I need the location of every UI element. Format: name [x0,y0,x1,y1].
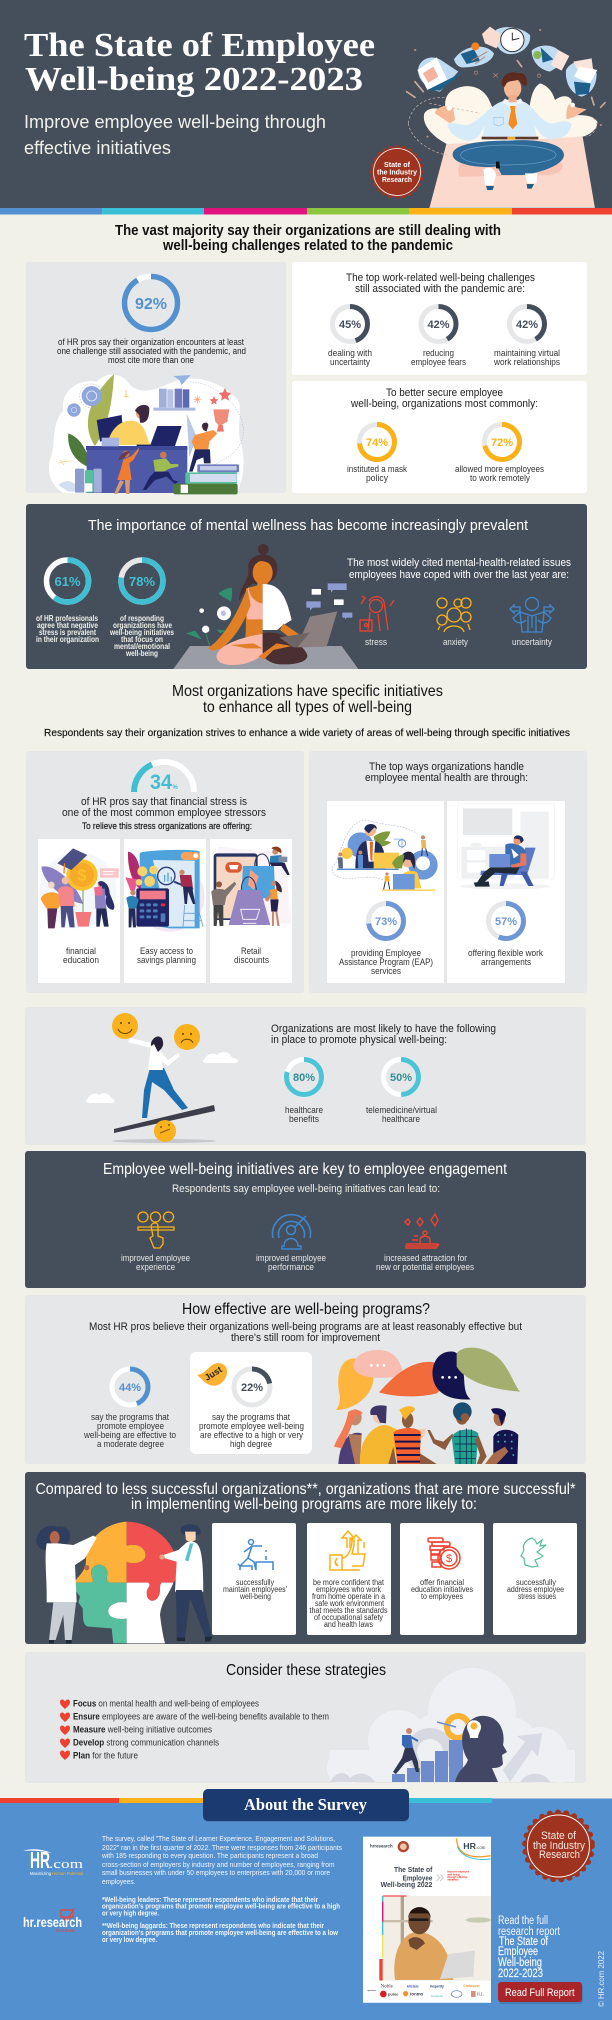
heading: specific initiatives [172,683,443,716]
subheading: lead to: Respondents say employee well-being initiatives can lead to: [172,1183,440,1195]
icon: increased attraction [405,1214,439,1248]
donut: 80% healthcare benefits: benefits [289,1114,319,1124]
donut: 78%: of responding [120,614,164,623]
card: retail discounts: discounts [234,955,269,965]
donut: 44% moderate degree: 44% [119,1382,141,1394]
text: mental-health issues heading: The most widely cited mental-health-related issues [347,557,571,569]
illustration: meditating man with floating office items [407,27,605,209]
card: work from home safety: and health laws [324,1620,373,1629]
card: financial education: education [63,955,99,965]
labels: stress anxiety uncertainty [365,637,552,647]
title [24,27,375,98]
icon: head with lightning [521,1538,546,1567]
text: secure well-being heading [350,387,538,410]
icon: stress [360,596,394,631]
donut: 42% reducing employee fears: reducing [423,348,454,358]
panel: top work-related challenges [292,262,587,375]
badge: State of the Industry Research: Research [382,177,412,184]
donut: 78%: well-being [125,649,158,658]
text: well-being leaders definition [102,1897,340,1918]
donut: 44% moderate degree [83,1369,176,1449]
heading: pandemic challenges: The vast majority say their organizations are still dealing with [115,222,501,239]
labels: engagement benefits: improved employee [256,1253,326,1263]
icon: thumbs up with arrows [330,1531,365,1570]
donut: 45% dealing with uncertainty: 45% [339,319,361,331]
donut: 44% moderate degree: well-being are effective to [83,1430,176,1440]
donut: 74% mask policy: instituted a mask [347,464,407,474]
badge: State of the Industry Research large: Research [539,1849,580,1861]
card: address stress issues: stress issues [518,1592,556,1601]
text: top ways heading: employee mental health are through: [365,772,528,784]
text: read the full research report: 2022-2023 [498,1968,543,1980]
gauge: 34%: 34 [150,771,172,794]
text: 92 percent description [57,337,246,365]
card: 22% high degree: are effective to a high or very [200,1430,303,1440]
text: secure well-being heading: well-being, organizations most commonly: [350,398,538,410]
text: read the full research report: Well-being [498,1957,542,1969]
illustration: climbing to head with lightbulb [327,1668,575,1786]
illustration: meditating woman with laptop [173,544,358,669]
donut: 61%: of HR professionals [36,614,98,623]
donut: 50% telemedicine: healthcare [382,1114,420,1124]
badge: State of the Industry Research large: State of [541,1830,577,1842]
heading: consider these strategies: Consider these strategies [226,1662,386,1679]
report cover: Improve employee [447,1871,470,1874]
donut: 57% [488,904,524,938]
donut: 42% maintaining virtual work relationships: work relationships [493,357,560,367]
banner: About the Survey [203,1789,409,1822]
donut: 78%: mental/emotional [114,642,170,651]
report cover: Crossover [463,1984,480,1988]
heading: specific initiatives: to enhance all types of well-being [203,699,412,716]
list: strategies: Develop strong communication channels [73,1738,219,1748]
labels: stress anxiety uncertainty: uncertainty [512,637,552,647]
text: well-being laggards definition: or very low degree. [102,1937,157,1944]
donut: 73% [368,904,404,938]
report cover: hrresearch [370,1844,393,1849]
logo: HR.com [23,1847,83,1876]
card: financial education initiatives [400,1523,484,1635]
card: flexible work arrangements: arrangements [481,957,531,967]
card: retail discounts: Retail [241,946,261,956]
card: address stress issues [493,1523,577,1635]
panel: consider these strategies [25,1652,586,1786]
text: challenges heading [346,272,535,295]
text: well-being leaders definition: organization's programs that promote employee well-being are effective to a high [102,1904,340,1910]
card: work from home safety: be more confident that [313,1578,385,1587]
illustration: office workers and trophy [49,374,244,494]
report cover: JLL [477,1992,484,1997]
text: effectiveness subheading [89,1321,522,1344]
donut: 73%: 73% [375,916,397,928]
donut: 92%: 92% [135,296,167,313]
illustration: woman balancing emotions on a seesaw [86,1013,238,1143]
logo: HR.com: .com [49,1856,83,1871]
report cover: well-being [447,1873,460,1876]
card: address stress issues: address employee [507,1585,564,1594]
donut: 92% [124,276,178,330]
text: survey description: employees. [102,1877,136,1886]
list: strategies: Focus on mental health and well-being of employees [73,1698,259,1710]
card: maintain well-being: well-being [239,1592,271,1601]
card: maintain well-being [212,1523,296,1635]
panel: mental health handling [309,751,587,993]
donut: 44% moderate degree: a moderate degree [97,1439,164,1449]
donut: 42% reducing employee fears: 42% [427,319,450,331]
text: well-being leaders definition: *Well-being leaders: These represent respondents who indicate that their [102,1897,318,1904]
text: survey description: The survey, called "The State of Learner Experience, Engagement and Solutions, [102,1834,335,1843]
report cover: initiatives [447,1879,459,1882]
subheading: respondents: Respondents say their organization strives to enhance a wide variety of areas of well-being through specific initiatives [44,727,570,739]
heading: pandemic challenges [115,222,501,254]
labels: engagement benefits: performance [268,1262,314,1272]
subtitle: Improve employee well-being through [24,111,326,132]
card: work from home safety: safe work environment [315,1599,385,1608]
donut: 74% mask policy: 74% [366,437,388,449]
banner: About the Survey: About the Survey [244,1795,367,1814]
donut: 61%: agree that negative [37,621,98,630]
card: financial education: $ [78,868,87,885]
report cover: pulse [388,1991,399,1996]
card: work from home safety: of occupational safety [314,1613,383,1622]
text: challenges heading: still associated with the pandemic are: [355,283,525,295]
heading: mental wellness: The importance of mental wellness has become increasingly prevalent [88,517,529,534]
report cover: Allstate [407,1984,419,1988]
title: The State of Employee [24,27,375,64]
card: savings planning [124,839,206,983]
donut: 61%: in their organization [36,635,99,644]
panel: mental wellness [26,504,587,669]
button: Read Full Report: Read Full Report [505,1987,574,1999]
heading: employee engagement: Employee well-being initiatives are key to employee engagement [103,1161,508,1178]
badge: State of the Industry Research: State of [384,162,411,169]
card: 22% high degree: 22% [241,1382,263,1394]
card: employee assistance program: Assistance Program (EAP) [339,957,433,967]
donut: 61%: stress is prevalent [39,628,96,637]
panel: secure employee well-being [292,381,587,493]
panel: effectiveness of programs [25,1295,586,1464]
text: read the full research report: The State of [499,1936,549,1948]
text: financial stress: of HR pros say that financial stress is [81,796,247,808]
icon: improved performance [273,1215,310,1249]
donut: 80% healthcare benefits [285,1060,323,1124]
card: flexible work arrangements [447,801,565,983]
text: mental-health issues heading: employees have coped with over the last year are: [349,569,569,581]
labels: stress anxiety uncertainty: anxiety [443,637,468,647]
text: read the full research report [498,1915,561,1980]
text: survey description: small businesses with under 50 employees to enterprises with 20,000 or more [102,1868,330,1877]
panel: 92 percent [26,262,286,494]
text: 92 percent description: of HR pros say their organization encounters at least [58,337,244,347]
text: financial stress: one of the most common employee stressors [62,807,266,819]
logo: HR.com: HR [30,1847,50,1873]
card: financial education [38,839,120,983]
text: read the full research report: Read the full [498,1915,548,1927]
copyright: © HR.com 2022 [597,1950,606,2007]
text: well-being leaders definition: or very high degree. [102,1910,159,1918]
badge: State of the Industry Research [372,147,422,197]
donut: 80% healthcare benefits: 80% [293,1072,315,1084]
text: top ways heading [365,761,528,784]
report cover: Insperity [430,1984,444,1988]
icon: climbing figure [238,1540,273,1570]
icon: uncertainty [510,598,554,632]
donut: 42% reducing employee fears: employee fears [411,357,466,367]
donut: 45% dealing with uncertainty [328,306,372,367]
donut: 50% telemedicine: telemedicine/virtual [366,1105,437,1115]
logo: hr.research [23,1908,82,1933]
list: strategies: Ensure employees are aware of the well-being benefits available to them [73,1712,329,1722]
card: 22% high degree [190,1352,312,1454]
text: 92 percent description: most cite more than one [108,355,194,365]
logo: HR.com: Maximizing Human Potential [30,1871,83,1876]
text: read the full research report: Employee [498,1946,538,1958]
icon: anxiety [437,598,471,632]
card: maintain well-being: successfully [236,1578,274,1587]
text: well-being laggards definition [102,1923,338,1944]
donut: 44% moderate degree: say the programs that [91,1412,169,1422]
text: secure well-being heading: To better secure employee [386,387,503,399]
icon: hearts [60,1699,70,1760]
icon: coins stack: $ [446,1553,452,1565]
card: address stress issues: successfully [516,1578,556,1587]
heading: compared to less successful organizations: in implementing well-being programs are more likely to: [131,1496,477,1513]
card: work from home safety: from home operate in a [312,1592,385,1601]
card: 22% high degree: say the programs that [212,1412,290,1422]
text: survey description [101,1834,342,1886]
donut: 50% telemedicine [366,1060,437,1124]
list: strategies [60,1698,329,1762]
report cover [363,1837,491,2003]
text: physical well-being heading: in place to promote physical well-being: [271,1034,447,1046]
button: Read Full Report [498,1982,583,2004]
card: employee assistance program [327,801,444,983]
list: strategies: Measure well-being initiative outcomes [73,1724,212,1736]
report cover: Accelerate [431,1994,444,1998]
report cover: The State of [394,1867,433,1874]
labels: engagement benefits [121,1253,474,1272]
report cover: Employee [403,1875,432,1882]
text: challenges heading: The top work-related well-being challenges [346,272,535,284]
donut: 72% remote work: 72% [491,437,513,449]
donut: 61%: 61% [54,574,81,589]
donut: 80% healthcare benefits: healthcare [285,1105,323,1115]
labels: stress anxiety uncertainty: stress [365,637,387,647]
text: effectiveness subheading: there's still room for improvement [231,1332,380,1344]
badge: Just: Just [203,1364,224,1383]
heading: pandemic challenges: well-being challenges related to the pandemic [162,237,453,254]
donut: 45% dealing with uncertainty: dealing with [328,348,372,358]
text: top ways heading: The top ways organizations handle [369,761,524,773]
logo: hr.research: institute [56,1928,76,1933]
heading: specific initiatives: Most organizations have specific initiatives [172,683,443,700]
card: 22% high degree: promote employee well-being [199,1421,304,1431]
donut: 72% remote work [455,424,544,483]
card: retail discounts [210,839,292,983]
donut: 57%: 57% [495,916,517,928]
donut: 50% telemedicine: 50% [390,1072,412,1084]
report cover: HR [463,1842,476,1851]
card: flexible work arrangements: offering flexible work [468,948,543,958]
report cover: sponsors [367,1989,377,1992]
gauge: 34%: % [172,785,178,791]
text: well-being laggards definition: organization's programs that promote employee well-being are effective to a low [102,1930,338,1937]
donut: 42% maintaining virtual work relationships [493,306,560,367]
card: employee assistance program: services [371,966,401,976]
text: read the full research report: research report [498,1926,561,1938]
list: strategies: Plan for the future [73,1750,138,1762]
card: savings planning: savings planning [137,955,196,965]
card: work from home safety: that meets the standards [310,1606,388,1615]
donut: 78%: organizations have [113,621,172,630]
gauge: 34% [134,762,194,794]
labels: engagement benefits: experience [136,1262,175,1272]
badge: State of the Industry Research: the Industry [377,170,417,176]
report cover: through effective [447,1876,468,1879]
card: maintain well-being: maintain employees' [223,1585,287,1594]
panel: financial stress [26,751,304,993]
text: physical well-being heading: Organizations are most likely to have the following [271,1023,496,1035]
text: physical well-being heading [271,1023,496,1046]
card: financial education initiatives: education initiatives [411,1585,473,1594]
labels: engagement benefits: increased attraction for [384,1253,467,1263]
donut: 45% dealing with uncertainty: uncertainty [330,357,370,367]
donut: 61% [36,560,99,644]
donut: 78%: well-being initiatives [109,628,174,637]
card: 22% high degree: high degree [230,1439,272,1449]
donut: 78%: that focus on [121,635,163,644]
subtitle [24,111,326,158]
text: effectiveness subheading: Most HR pros believe their organizations well-being programs are at least reasonably effective but [89,1321,522,1333]
report cover: Well-being 2022 [381,1882,432,1889]
donut: 72% remote work: to work remotely [470,473,530,483]
text: survey description: cross-section of employers by industry and number of employees, ranging from [102,1860,334,1869]
donut: 74% mask policy [347,424,407,483]
text: well-being laggards definition: **Well-being laggards: These represent respondents who indicate that their [102,1923,324,1930]
donut: 42% maintaining virtual work relationships: 42% [516,319,538,331]
illustration: colleagues talking with speech bubbles [334,1348,520,1464]
donut: 42% reducing employee fears [411,306,466,367]
donut: 78% [109,560,174,658]
donut: 72% remote work: allowed more employees [455,464,544,474]
heading: how effective: How effective are well-being programs? [182,1301,430,1318]
card: work from home safety: employees who work [316,1585,382,1594]
text: financial stress: To relieve this stress organizations are offering: [82,821,252,831]
badge: State of the Industry Research large [525,1812,592,1880]
text: mental-health issues heading [347,557,571,581]
report cover: Noble [381,1985,394,1990]
badge: State of the Industry Research large: the Industry [533,1840,585,1852]
card: work from home safety [307,1523,391,1635]
donut: 78%: 78% [129,574,155,589]
donut: 42% maintaining virtual work relationships: maintaining virtual [494,348,560,358]
panel: physical well-being [25,1007,586,1145]
illustration: people assembling head puzzle [36,1522,213,1643]
donut: 74% mask policy: policy [366,473,388,483]
heading: compared to less successful organizations [36,1481,576,1513]
panel: successful organizations [25,1472,586,1644]
footer: about the survey [0,1789,612,2020]
card: employee assistance program: providing Employee [351,948,421,958]
subtitle: effective initiatives [24,137,171,158]
card: savings planning: Easy access to [140,946,193,956]
logo: hr.research: hr.research [23,1914,82,1930]
card: financial education: financial [66,946,96,956]
text: survey description: with 185 responding to every question. The participants represent a broad [101,1851,318,1860]
report cover: tonmo [410,1991,424,1996]
text: survey description: 2022" ran in the first quarter of 2022. There were responses from 246 participants [102,1843,342,1852]
labels: engagement benefits: new or potential employees [376,1262,474,1272]
labels: engagement benefits: improved employee [121,1253,190,1263]
text: financial stress [62,796,266,831]
title: Well-being 2022-2023 [25,61,363,98]
text: 92 percent description: one challenge still associated with the pandemic, and [57,346,246,356]
card: financial education initiatives: offer financial [420,1578,464,1587]
donut: 44% moderate degree: promote employee [97,1421,164,1431]
panel: employee engagement [25,1151,586,1288]
card: financial education initiatives: to employees [421,1592,463,1601]
icon: improved experience [138,1212,174,1248]
header banner [0,0,612,214]
report cover: .com [476,1845,486,1850]
